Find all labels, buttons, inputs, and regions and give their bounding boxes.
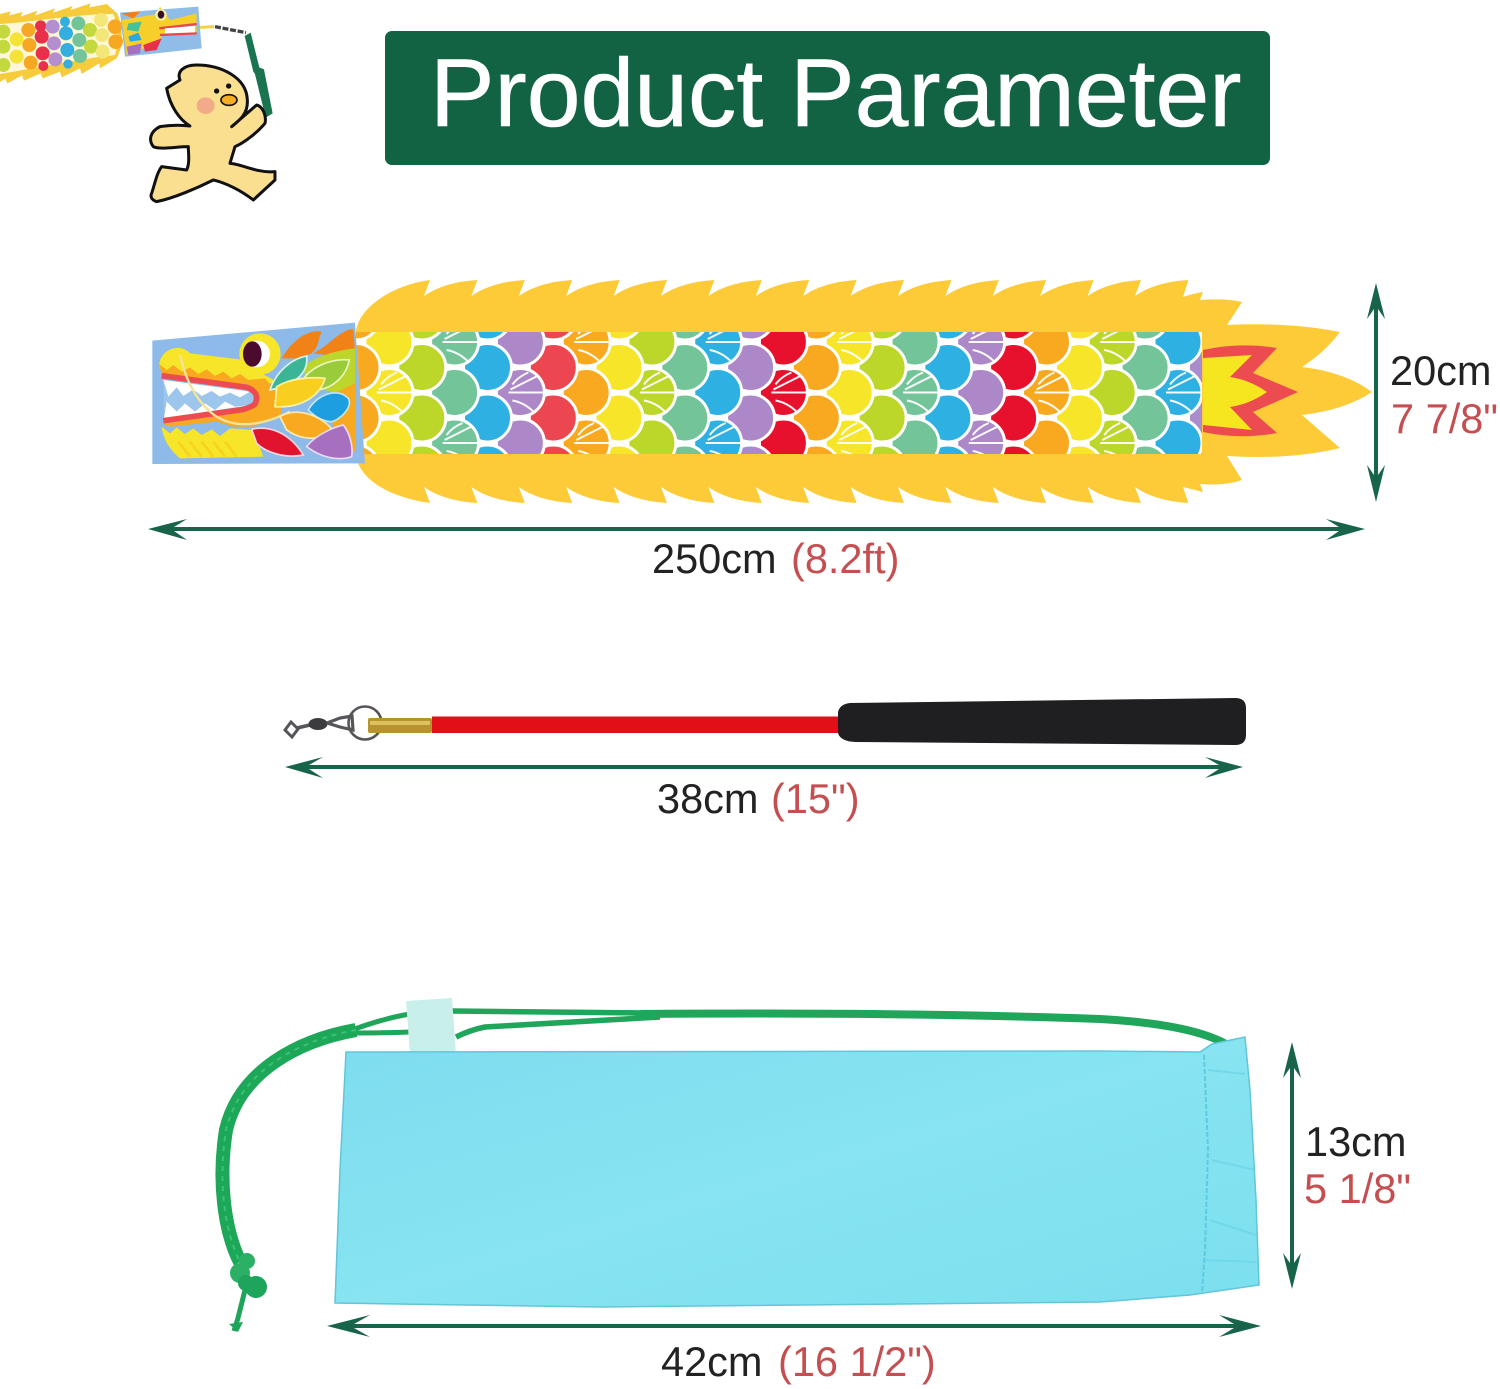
thin cords [352, 1011, 1226, 1044]
rainbow scale band [356, 332, 1202, 454]
string and swivel [200, 22, 214, 32]
title: Product Parameter [430, 39, 1241, 147]
icon: chick running with mini dragon [0, 3, 275, 202]
eye [239, 333, 281, 375]
bag body [335, 1037, 1259, 1307]
label: dragon length: 250cm [652, 535, 777, 582]
dragon streamer [152, 280, 1372, 503]
chick face [197, 83, 237, 114]
long cord with knot [222, 1030, 356, 1332]
label: dragon length [652, 535, 899, 582]
chick body [151, 65, 275, 202]
handle stick [285, 698, 1246, 745]
arrow: dragon width [1367, 283, 1385, 502]
label: handle length [657, 775, 860, 822]
swivel and ring [285, 706, 382, 740]
lower jaw [162, 427, 263, 458]
label: bag length: 42cm [661, 1338, 762, 1385]
mini dragon body [0, 3, 123, 83]
arrow: bag length [327, 1315, 1261, 1337]
label: dragon width: 7 7/8" [1391, 395, 1498, 442]
upper jaw [159, 348, 280, 383]
webbing loop [406, 998, 456, 1054]
arrow: handle length [285, 757, 1243, 778]
arrow: bag height [1283, 1042, 1301, 1289]
black grip [838, 698, 1246, 745]
spiky yellow body and tail [356, 280, 1372, 503]
label: dragon width [1390, 347, 1498, 442]
label: bag height: 13cm [1305, 1118, 1406, 1165]
petals [270, 356, 307, 390]
brass ferrule [368, 718, 432, 733]
label: dragon width: 20cm [1390, 347, 1491, 394]
label: bag length [661, 1338, 936, 1385]
drawstring bag [222, 998, 1259, 1332]
dragon head [152, 323, 365, 464]
label: bag height: 5 1/8" [1304, 1165, 1411, 1212]
label: bag height [1304, 1118, 1411, 1212]
label: handle length: 38cm [657, 775, 758, 822]
mouth [163, 380, 253, 418]
mini dragon head [120, 7, 202, 57]
tail flame [1203, 345, 1298, 436]
title banner [385, 31, 1270, 165]
label: handle length: (15") [771, 775, 860, 822]
green stick [245, 33, 273, 118]
crests [282, 331, 322, 358]
label: bag length: (16 1/2") [778, 1338, 936, 1385]
arrow: dragon length [148, 519, 1365, 540]
seam and shading [1202, 1055, 1256, 1292]
label: dragon length: (8.2ft) [791, 535, 899, 582]
red rod [432, 716, 840, 733]
